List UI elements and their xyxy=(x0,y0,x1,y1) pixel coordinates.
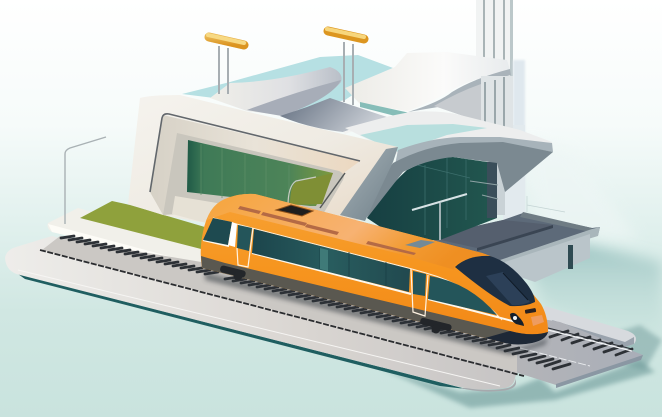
windshield xyxy=(455,256,535,306)
ground shadow under slab xyxy=(18,274,655,408)
handrail xyxy=(412,194,467,240)
headlight xyxy=(510,313,524,326)
overhead sign right xyxy=(327,29,364,105)
upper roof wing xyxy=(345,52,513,128)
roof hatch xyxy=(276,205,313,216)
cab window xyxy=(203,218,232,245)
door outline rear xyxy=(411,269,428,316)
right slab end xyxy=(540,306,662,370)
white panel xyxy=(228,222,237,247)
upper white trim xyxy=(213,218,502,320)
left platform and lawn xyxy=(48,201,230,272)
train body xyxy=(201,194,548,343)
dashed rail xyxy=(40,250,524,376)
curved canopy xyxy=(210,67,388,134)
rooftop pool xyxy=(182,55,393,110)
station plinth on the right xyxy=(427,196,600,282)
right rail xyxy=(520,328,632,366)
roof panel xyxy=(405,240,435,248)
train undercarriage xyxy=(201,256,548,344)
station front frame xyxy=(128,95,398,226)
door window front xyxy=(237,225,252,251)
overhead sign left xyxy=(208,35,244,94)
nose grille xyxy=(525,308,536,314)
white stripe xyxy=(203,240,520,323)
train roof xyxy=(207,194,498,270)
door outline front xyxy=(237,228,253,267)
rear window xyxy=(428,276,497,315)
lower right roof xyxy=(345,111,553,218)
roof vents xyxy=(238,206,416,255)
tower behind the station xyxy=(476,0,525,230)
train shadow xyxy=(205,272,548,355)
door window rear xyxy=(413,271,426,296)
orange train xyxy=(201,194,548,355)
sleepers xyxy=(61,236,632,369)
bogies xyxy=(219,265,452,334)
main passenger window xyxy=(252,229,410,292)
dark glass facade on the right xyxy=(367,157,505,240)
front concrete slab xyxy=(5,236,517,392)
gray track bed xyxy=(40,236,643,388)
street lamp left xyxy=(65,137,106,224)
